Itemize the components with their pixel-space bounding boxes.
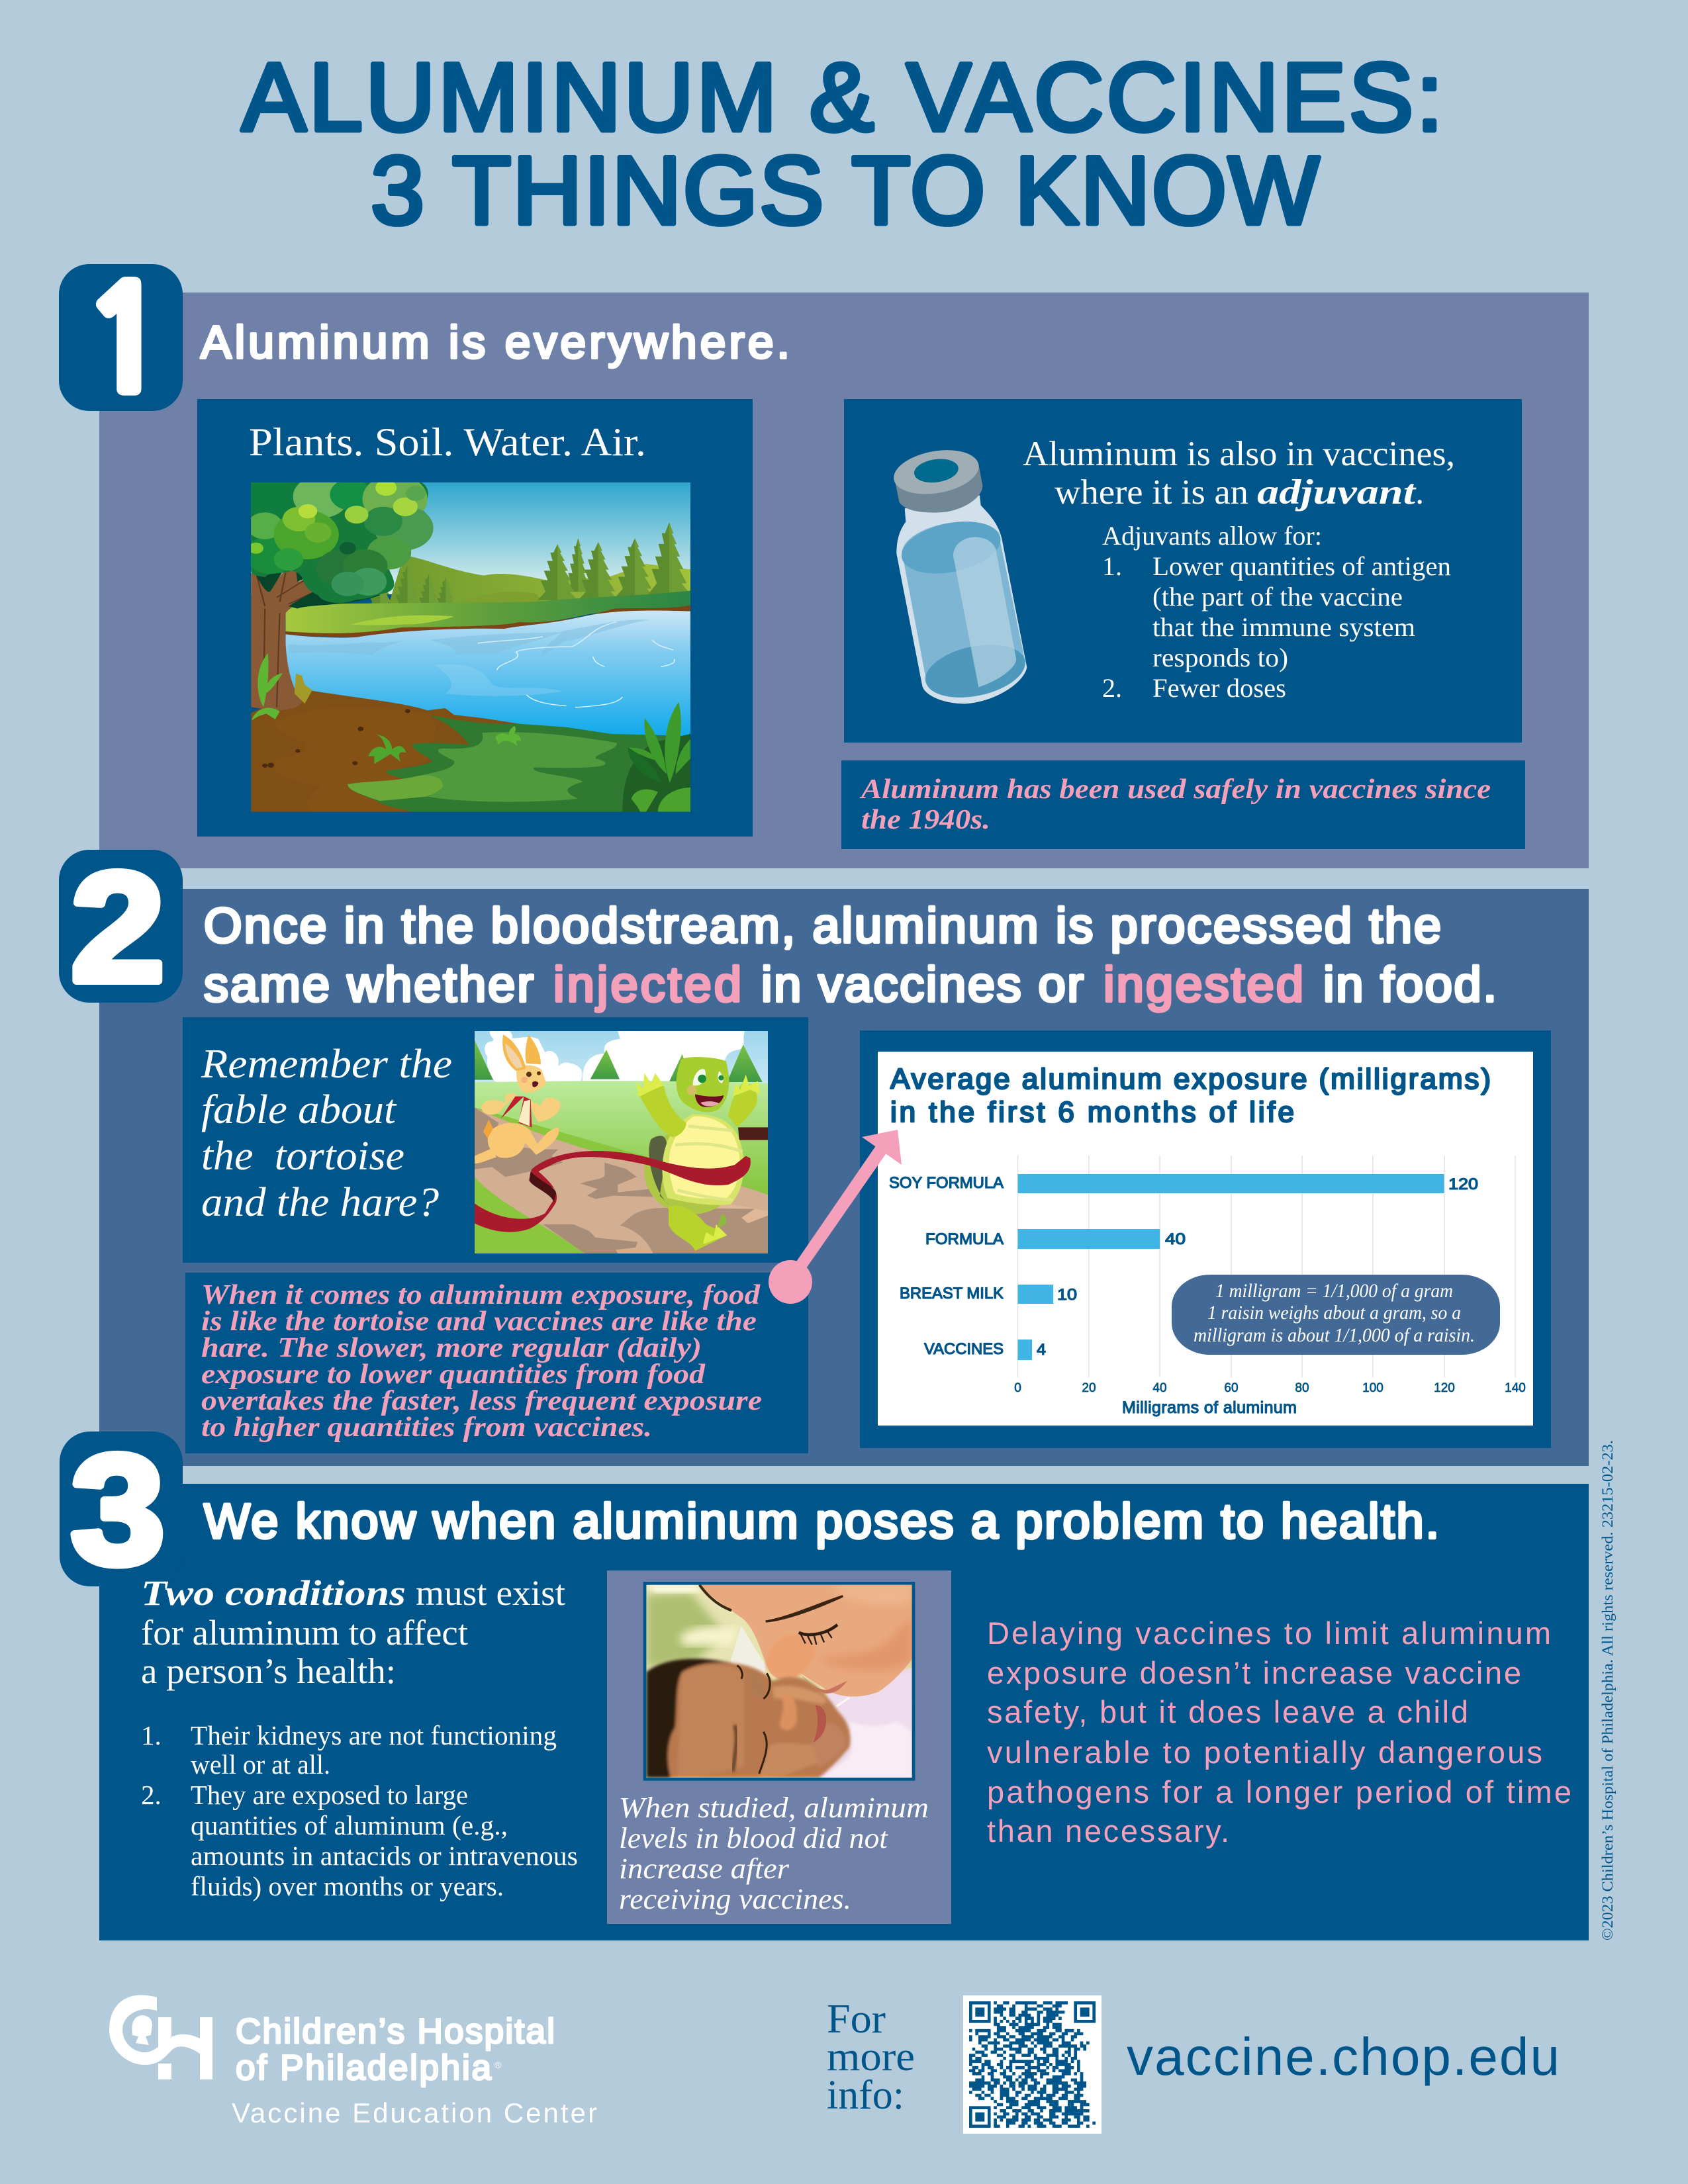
QR code xyxy=(963,1995,1102,2134)
bar labels xyxy=(889,1174,1004,1358)
callout: used safely since the 1940s: the 1940s. xyxy=(861,805,990,835)
badge: number 3: 3 xyxy=(71,1422,165,1596)
text: remember the fable: and the hare? xyxy=(201,1180,439,1225)
footer logo: Children's Hospital of Philadelphia: of Philadelphia xyxy=(236,2048,492,2087)
x axis title: Milligrams of aluminum xyxy=(1122,1398,1297,1417)
panel: food is the tortoise: exposure to lower quantities from food xyxy=(201,1359,706,1390)
chart title: in the first 6 months of life xyxy=(890,1096,1294,1128)
panel: aluminum in vaccines xyxy=(844,399,1522,743)
footer logo: Children's Hospital of Philadelphia: ® xyxy=(494,2060,502,2070)
panel: food is the tortoise xyxy=(185,1273,808,1453)
bar values: 120 xyxy=(1448,1175,1478,1193)
callout: milligram explanation: milligram is about 1/1,000 of a raisin. xyxy=(1194,1324,1475,1346)
list: adjuvants allow for: responds to) xyxy=(1152,643,1288,672)
bar values: 4 xyxy=(1037,1341,1046,1359)
bars xyxy=(1018,1174,1444,1360)
text: delaying vaccines xyxy=(987,1615,1571,1848)
heading 2: Once in the bloodstream, aluminum is processed the xyxy=(204,898,1441,953)
list: two conditions: 1. xyxy=(141,1720,162,1751)
heading 2: in vaccines or xyxy=(761,957,1084,1012)
caption: aluminum levels: When studied, aluminum xyxy=(619,1792,929,1824)
panel: food is the tortoise: hare. The slower, more regular (daily) xyxy=(201,1333,702,1363)
text: remember the fable: the tortoise xyxy=(201,1134,404,1179)
badge: number 1: 1 xyxy=(82,270,169,412)
badge: number 2: 2 xyxy=(71,840,165,1014)
panel: mother and baby photo xyxy=(607,1570,951,1924)
panel 1: aluminum is everywhere xyxy=(99,293,1589,868)
heading 2 xyxy=(204,898,1497,1012)
bar values: 10 xyxy=(1057,1286,1077,1304)
x axis ticks: 40 xyxy=(1152,1381,1167,1395)
panel: food is the tortoise: overtakes the faster, less frequent exposure xyxy=(201,1386,762,1416)
list: two conditions: quantities of aluminum (e.g., xyxy=(191,1810,508,1841)
x axis ticks: 120 xyxy=(1434,1381,1455,1395)
footer logo: Children's Hospital of Philadelphia: Vaccine Education Center xyxy=(232,2097,597,2128)
text: two conditions: Two conditions xyxy=(141,1573,406,1613)
text: two conditions: must exist xyxy=(416,1573,565,1613)
text: delaying vaccines: pathogens for a longer period of time xyxy=(987,1774,1571,1809)
x axis ticks: 60 xyxy=(1224,1381,1239,1395)
title xyxy=(242,43,1443,244)
text: aluminum is also in vaccines: . xyxy=(1415,473,1424,512)
x axis ticks: 100 xyxy=(1362,1381,1383,1395)
panel 2: processed the same xyxy=(99,889,1589,1466)
heading 2: ingested xyxy=(1103,957,1303,1012)
list: adjuvants allow for: 2. xyxy=(1102,673,1122,703)
text: aluminum is also in vaccines: where it is an xyxy=(1055,473,1248,512)
panel: bar chart xyxy=(860,1030,1551,1448)
bar labels: FORMULA xyxy=(925,1230,1004,1248)
text: for more info xyxy=(827,1997,915,2118)
callout: milligram explanation: 1 milligram = 1/1,000 of a gram xyxy=(1215,1280,1453,1302)
bar values xyxy=(1037,1175,1478,1359)
list: adjuvants allow for: (the part of the vaccine xyxy=(1152,582,1403,612)
x axis ticks: 80 xyxy=(1295,1381,1309,1395)
list: adjuvants allow for: Lower quantities of antigen xyxy=(1152,551,1451,581)
list: adjuvants allow for: Adjuvants allow for: xyxy=(1102,521,1322,551)
text: remember the fable: Remember the xyxy=(201,1042,452,1087)
list: two conditions: 2. xyxy=(141,1780,162,1810)
text: delaying vaccines: exposure doesn’t increase vaccine xyxy=(987,1655,1521,1690)
icon: vaccine vial xyxy=(894,450,1027,704)
list: adjuvants allow for xyxy=(1102,521,1451,703)
bar labels: VACCINES xyxy=(924,1340,1004,1358)
text: aluminum is also in vaccines xyxy=(1023,435,1455,512)
callout: milligram explanation: 1 raisin weighs about a gram, so a xyxy=(1207,1302,1461,1324)
list: two conditions: well or at all. xyxy=(191,1749,330,1780)
caption: aluminum levels: increase after xyxy=(619,1852,790,1885)
text: remember the fable xyxy=(201,1042,452,1225)
list: adjuvants allow for: 1. xyxy=(1102,551,1122,581)
illustration: hare and tortoise race xyxy=(475,1031,768,1253)
list: two conditions: Their kidneys are not functioning xyxy=(191,1720,557,1751)
text: aluminum is also in vaccines: Aluminum is also in vaccines, xyxy=(1023,435,1455,473)
text: two conditions: a person’s health: xyxy=(141,1651,396,1691)
chart title: Average aluminum exposure (milligrams) xyxy=(890,1063,1491,1095)
bar labels: BREAST MILK xyxy=(900,1285,1004,1302)
list: two conditions: They are exposed to large xyxy=(191,1780,468,1810)
heading 2: injected xyxy=(553,957,741,1012)
text: delaying vaccines: safety, but it does leave a child xyxy=(987,1694,1468,1729)
url: vaccine.chop.edu: vaccine.chop.edu xyxy=(1127,2027,1560,2086)
footer logo: Children's Hospital of Philadelphia xyxy=(109,1995,597,2128)
text: delaying vaccines: vulnerable to potentially dangerous xyxy=(987,1735,1542,1770)
text: two conditions xyxy=(141,1573,565,1691)
list: adjuvants allow for: that the immune system xyxy=(1152,612,1415,642)
panel: food is the tortoise: is like the tortoise and vaccines are like the xyxy=(201,1306,757,1337)
photo: mother kissing baby xyxy=(643,1582,915,1781)
caption: aluminum levels xyxy=(619,1792,929,1915)
callout: milligram explanation xyxy=(1172,1275,1500,1355)
badge: number 1 xyxy=(59,264,183,412)
arrow: food to chart xyxy=(769,1130,902,1304)
chart title xyxy=(890,1063,1491,1128)
footer logo: Children's Hospital of Philadelphia: Children’s Hospital xyxy=(236,2012,555,2051)
x axis ticks: 0 xyxy=(1014,1381,1021,1395)
list: two conditions xyxy=(141,1720,578,1901)
caption: plants soil water air: Plants. Soil. Water. Air. xyxy=(249,420,646,464)
bar labels: SOY FORMULA xyxy=(889,1174,1004,1192)
bar values: 40 xyxy=(1165,1230,1186,1248)
heading 1: Aluminum is everywhere. xyxy=(201,316,790,368)
list: two conditions: fluids) over months or years. xyxy=(191,1871,504,1901)
badge: number 2 xyxy=(59,840,183,1014)
text: delaying vaccines: Delaying vaccines to limit aluminum xyxy=(987,1615,1551,1651)
heading 3: We know when aluminum poses a problem to health. xyxy=(204,1494,1439,1549)
x axis ticks: 20 xyxy=(1082,1381,1096,1395)
text: remember the fable: fable about xyxy=(201,1087,397,1132)
heading 2: in food. xyxy=(1323,957,1497,1012)
copyright line: ©2023 Children’s Hospital of Philadelphia. All rights reserved. 23215-02-23. xyxy=(1599,1440,1616,1940)
x axis ticks xyxy=(1014,1381,1526,1395)
panel: plants soil water air xyxy=(197,399,753,837)
caption: aluminum levels: levels in blood did not xyxy=(619,1822,889,1854)
callout: used safely since the 1940s: Aluminum has been used safely in vaccines since xyxy=(859,774,1491,805)
title: 3 THINGS TO KNOW xyxy=(371,136,1319,244)
x axis ticks: 140 xyxy=(1505,1381,1526,1395)
heading 2: same whether xyxy=(204,957,534,1012)
title: ALUMINUM & VACCINES: xyxy=(242,43,1443,151)
panel: tortoise and hare fable xyxy=(183,1017,808,1263)
list: adjuvants allow for: Fewer doses xyxy=(1152,673,1286,703)
text: two conditions: for aluminum to affect xyxy=(141,1613,468,1653)
illustration: lake scene xyxy=(251,482,690,811)
text: for more info: info: xyxy=(827,2073,904,2118)
text: for more info: For xyxy=(827,1997,886,2042)
list: two conditions: amounts in antacids or intravenous xyxy=(191,1841,578,1871)
icon: CH monogram xyxy=(109,1995,212,2079)
callout: used safely since the 1940s xyxy=(841,760,1525,849)
text: aluminum is also in vaccines: adjuvant xyxy=(1257,473,1417,512)
panel: food is the tortoise: to higher quantities from vaccines. xyxy=(201,1412,652,1443)
text: delaying vaccines: than necessary. xyxy=(987,1813,1229,1848)
text: for more info: more xyxy=(827,2034,915,2079)
panel: food is the tortoise: When it comes to aluminum exposure, food xyxy=(201,1280,761,1310)
panel 3: when aluminum poses a problem xyxy=(60,1422,1589,1940)
caption: aluminum levels: receiving vaccines. xyxy=(619,1883,851,1915)
